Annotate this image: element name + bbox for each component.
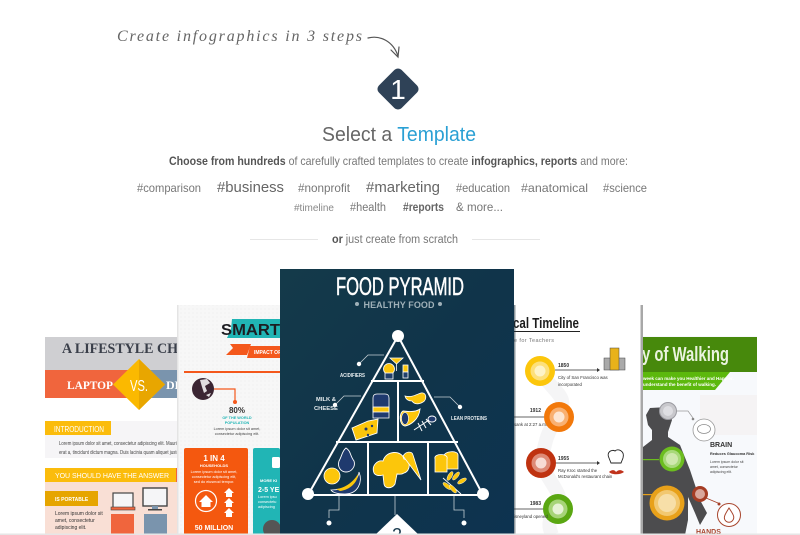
template card: lifestyle comparison: [45, 337, 183, 535]
connector labels: [314, 355, 487, 526]
globe stat: Lorem ipsum dolor sit amet,: [214, 427, 260, 431]
timeline title: [513, 315, 580, 344]
food icon: melon: [331, 472, 360, 494]
food icon: bread: [435, 452, 458, 472]
globe stat: OF THE WORLD: [222, 416, 252, 420]
globe stat: POPULATION: [225, 421, 250, 425]
category tags: #education: [456, 181, 510, 195]
intro text: Choose from hundreds of carefully crafted templates to create infographics, reports and more:: [169, 154, 628, 168]
1912 entry: sank at 2:27 a.m.: [514, 422, 547, 427]
walking title: y of Walking: [642, 344, 729, 366]
pyramid title: FOOD PYRAMID: [336, 273, 464, 301]
orange households panel: sed do eiusmod tempor.: [194, 480, 234, 484]
food icon: milk carton: [373, 394, 389, 418]
1850 entry: [525, 348, 625, 387]
category tags: #business: [217, 179, 284, 196]
orange households panel: HOUSEHOLDS: [200, 463, 228, 468]
food icon: orange: [324, 468, 340, 484]
step one badge: 1: [390, 74, 406, 105]
brain icon and label: [676, 411, 755, 474]
lifestyle title band: [45, 337, 180, 370]
food icon: carrot: [403, 452, 421, 480]
1983 entry: isneyland opened: [514, 514, 548, 519]
pyramid subtitle: HEALTHY FOOD: [364, 300, 435, 310]
category tags: #comparison: [137, 181, 201, 195]
answer section: YOU SHOULD HAVE THE ANSWER: [55, 473, 169, 480]
template card: historical timeline: [513, 305, 643, 535]
template card: smart: [177, 305, 281, 535]
connector labels: LEAN PROTEINS: [451, 416, 487, 422]
body silhouette: [643, 407, 707, 535]
food icon: cheese: [352, 419, 378, 440]
answer section: IS PORTABLE: [55, 497, 89, 503]
category tags: #nonprofit: [298, 181, 351, 195]
brain icon and label: adipiscing elit.: [710, 470, 732, 474]
globe stat: consectetur adipiscing elit.: [215, 432, 259, 436]
category tags: & more...: [456, 202, 503, 214]
teal panel: consectetu: [258, 500, 276, 504]
device icons: [111, 488, 167, 535]
template card: walking: [642, 336, 757, 535]
orange households panel: consectetur adipiscing elit,: [192, 475, 236, 479]
food icon: broccoli: [373, 452, 409, 488]
introduction section: Lorem ipsum dolor sit amet, consectetur adipiscing elit. Mauris: [59, 441, 179, 447]
1850 entry: incorporated: [558, 382, 582, 387]
1912 entry: 1912: [530, 408, 541, 414]
category tags: #timeline: [294, 202, 334, 214]
smart title ribbon: IMPACT OF: [254, 350, 281, 356]
timeline title: cal Timeline: [513, 315, 579, 332]
connector labels: MILK &: [316, 397, 336, 403]
versus band: LAPTOP: [67, 378, 113, 392]
teal panel: Lorem ipsu: [258, 495, 277, 499]
1955 entry: Ray Kroc started the: [558, 468, 598, 473]
category tags: #reports: [403, 202, 444, 214]
walking title: [642, 337, 757, 390]
lifestyle title band: A LIFESTYLE CH: [62, 341, 178, 357]
timeline title: e for Teachers: [514, 338, 554, 344]
smart title ribbon: SMART: [221, 322, 280, 339]
pyramid frame: [308, 336, 483, 495]
1850 entry: 1850: [558, 363, 569, 369]
versus band: VS.: [130, 378, 148, 395]
globe stat: [192, 378, 260, 436]
handwritten tagline: Create infographics in 3 steps: [117, 28, 362, 45]
arrow to step one: [368, 37, 399, 57]
teal panel: 2-5 YE: [258, 487, 280, 494]
brain icon and label: Reduces Glaucoma Risk: [710, 452, 755, 456]
answer section: amet, consectetur: [55, 518, 95, 524]
food icon: fish bones: [414, 416, 436, 431]
connector labels: ACIDIFIERS: [340, 373, 365, 379]
category tags: [137, 179, 647, 214]
introduction section: [45, 421, 180, 458]
answer section: adipiscing elit.: [55, 525, 86, 531]
introduction section: erat a, tincidunt dictum magna. Duis lacinia quam aliquet justo: [59, 450, 179, 456]
globe stat: 80%: [229, 406, 245, 415]
walking title: week can make you Healthier and Happier.: [642, 376, 734, 381]
scratch option: or just create from scratch: [332, 234, 458, 246]
answer section: Lorem ipsum dolor sit: [55, 511, 103, 517]
hands icon and label: [696, 498, 740, 535]
food icon: ham: [400, 409, 420, 426]
food icon: drink and cupcake: [384, 358, 408, 379]
step two badge: [375, 514, 419, 535]
category tags: #health: [350, 202, 386, 214]
pyramid nodes: [302, 330, 489, 500]
food icon: wheat: [442, 471, 467, 494]
body markers: [643, 402, 708, 520]
teal panel: MORE KI: [260, 478, 277, 483]
1912 entry: [514, 402, 574, 432]
1983 entry: 1983: [530, 501, 541, 507]
1850 entry: City of San Francisco was: [558, 375, 608, 380]
versus band: DE: [166, 378, 183, 392]
orange households panel: 50 MILLION: [195, 525, 233, 532]
connector labels: CHEESE: [314, 406, 338, 412]
versus band: [45, 359, 183, 410]
walking title: understand the benefit of walking.: [643, 382, 716, 387]
brain icon and label: amet, consectetur: [710, 465, 739, 469]
orange households panel: Lorem ipsum dolor sit amet,: [191, 470, 237, 474]
heading: Select a Template: [322, 124, 476, 146]
step one badge: [375, 66, 421, 112]
teal panel: [253, 448, 281, 535]
answer section: [45, 468, 180, 535]
brain icon and label: Lorem ipsum dolor sit: [710, 460, 743, 464]
1955 entry: McDonald's restaurant chain: [558, 474, 613, 479]
category tags: #anatomical: [521, 181, 588, 195]
1955 entry: [526, 448, 624, 479]
template card: food pyramid: [280, 269, 514, 535]
orange households panel: [184, 448, 248, 535]
category tags: #science: [603, 181, 647, 195]
brain icon and label: BRAIN: [710, 442, 732, 449]
orange households panel: 1 IN 4: [203, 454, 225, 463]
smart title ribbon: [184, 319, 281, 373]
introduction section: INTRODUCTION: [54, 424, 104, 434]
1983 entry: [514, 494, 573, 524]
1955 entry: 1955: [558, 456, 569, 462]
food icon: chicken leg: [405, 393, 426, 404]
category tags: #marketing: [366, 179, 440, 196]
food icon: pear: [338, 448, 354, 472]
teal panel: adipiscing: [258, 505, 275, 509]
timeline ribbon: [540, 371, 562, 535]
